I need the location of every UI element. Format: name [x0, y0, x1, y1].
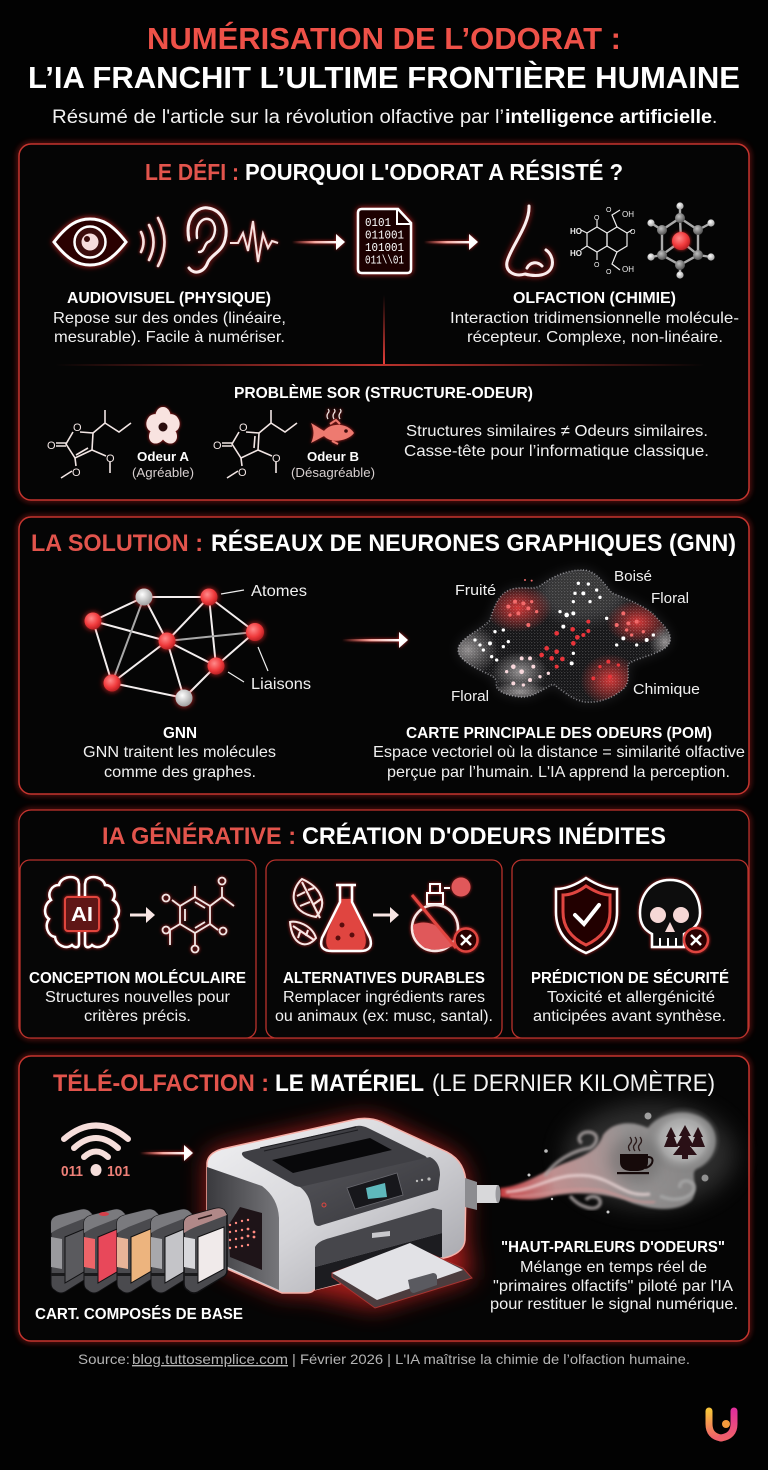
heading: la solution: LA SOLUTION :: [31, 530, 203, 557]
icon: digital file: 101001: [365, 241, 404, 255]
heading: le défi: LE DÉFI :: [145, 158, 239, 185]
card: conception moléculaire: [20, 860, 256, 1038]
icon: complex molecule: O: [606, 269, 612, 276]
icon: wifi signal: [61, 1126, 130, 1180]
label: odeur B: [291, 449, 375, 480]
molecule A: O: [106, 453, 115, 465]
text: alternatives: [275, 970, 493, 1025]
arrow: signal to file: [292, 234, 345, 250]
text: olfaction: [450, 290, 739, 346]
panel: le défi: [19, 144, 749, 500]
card: prédiction de sécurité: [512, 860, 748, 1038]
heading: problème SOR: PROBLÈME SOR (STRUCTURE-ODEUR): [234, 385, 533, 402]
printer body: [207, 1118, 466, 1293]
molecule B: O: [238, 467, 247, 479]
icon: complex molecule: [570, 207, 636, 276]
label: liaisons: Liaisons: [251, 676, 311, 693]
molecule A: O: [73, 422, 82, 434]
heading: le défi: POURQUOI L'ODORAT A RÉSISTÉ ?: [245, 158, 623, 185]
icon: 3D atom model: [647, 202, 715, 279]
icon: crossed perfume: [412, 878, 478, 952]
label: atomes: Atomes: [251, 583, 307, 600]
icon: signal waveform: [230, 221, 278, 262]
text: structures similaires: [404, 423, 709, 460]
text: carte principale: perçue par l’humain. L'IA apprend la perception.: [387, 764, 730, 781]
printer nozzle: [465, 1178, 477, 1210]
text: GNN: comme des graphes.: [104, 764, 256, 781]
icon: AI brain: AI: [71, 904, 93, 926]
subtitle: [52, 107, 717, 128]
text: alternatives: ou animaux (ex: musc, santal).: [275, 1008, 493, 1025]
icon: shield: [556, 878, 617, 953]
subtitle: .: [712, 107, 717, 128]
source footer: | Février 2026 | L'IA maîtrise la chimie de l’olfaction humaine.: [292, 1351, 690, 1367]
principal odor map blob: [456, 567, 672, 705]
molecule B: O: [213, 440, 222, 452]
map labels: Boisé: [614, 568, 652, 585]
molecule A: O: [72, 467, 81, 479]
text: audiovisuel: [53, 290, 286, 346]
arrow: flask to perfume: [373, 907, 399, 923]
icon: digital file: 011001: [365, 228, 404, 242]
label: odeur A: Odeur A: [137, 449, 190, 464]
panel: IA générative: [19, 810, 749, 1038]
map labels: Floral: [651, 590, 689, 607]
molecule B: O: [272, 453, 281, 465]
label: odeur A: (Agréable): [132, 465, 194, 480]
text: conception: Structures nouvelles pour: [45, 989, 231, 1006]
label: atomes: [221, 583, 307, 600]
card: alternatives durables: [266, 860, 502, 1038]
label: odeur A: [132, 449, 194, 480]
text: GNN: [83, 725, 276, 781]
molecule A: O: [47, 440, 56, 452]
source footer: blog.tuttosemplice.com: [132, 1351, 288, 1367]
text: prédiction: Toxicité et allergénicité: [547, 989, 715, 1006]
heading: télé-olfaction: (LE DERNIER KILOMÈTRE): [432, 1070, 715, 1097]
panel: télé-olfaction: [19, 1056, 749, 1341]
icon: complex molecule: O: [594, 262, 600, 269]
text: conception: CONCEPTION MOLÉCULAIRE: [29, 970, 246, 987]
text: alternatives: Remplacer ingrédients rares: [283, 989, 485, 1006]
panel: la solution: [19, 517, 749, 794]
text: prédiction: anticipées avant synthèse.: [533, 1008, 726, 1025]
text: haut-parleurs d'odeurs: pour restituer le signal numérique.: [490, 1296, 738, 1313]
icon: digital file: [358, 209, 411, 273]
scent smoke: [500, 1103, 735, 1214]
text: audiovisuel: AUDIOVISUEL (PHYSIQUE): [67, 290, 271, 307]
icon: complex molecule: OH: [622, 210, 634, 219]
icon: complex molecule: HO: [570, 227, 582, 236]
molecule B: [213, 410, 297, 479]
icon: complex molecule: OH: [622, 265, 634, 274]
icon: nose: [507, 206, 552, 275]
text: conception: [29, 970, 246, 1025]
title: L’IA FRANCHIT L’ULTIME FRONTIÈRE HUMAINE: [28, 60, 740, 95]
printer front: [300, 1157, 440, 1226]
subtitle: Résumé de l'article sur la révolution olfactive par l’: [52, 107, 504, 128]
text: audiovisuel: mesurable). Facile à numériser.: [54, 329, 285, 346]
text: prédiction: PRÉDICTION DE SÉCURITÉ: [531, 970, 729, 987]
printer: [207, 1118, 500, 1308]
text: structures similaires: Casse-tête pour l’informatique classique.: [404, 443, 709, 460]
heading: télé-olfaction: LE MATÉRIEL: [275, 1069, 424, 1097]
logo: [709, 1411, 734, 1438]
icon: AI brain: [45, 877, 119, 947]
text: audiovisuel: Repose sur des ondes (linéaire,: [53, 310, 286, 327]
text: haut-parleurs d'odeurs: Mélange en temps réel de: [520, 1259, 707, 1276]
text: GNN: GNN traitent les molécules: [83, 744, 276, 761]
heading: IA générative: IA GÉNÉRATIVE :: [102, 822, 296, 850]
source footer: Source:: [78, 1351, 130, 1367]
icon: trees: [664, 1125, 705, 1159]
arrow: file to nose: [424, 234, 478, 250]
source footer: [78, 1351, 690, 1367]
paper tray: [332, 1245, 472, 1308]
icon: skull: [640, 880, 708, 952]
icon: generated molecule: [162, 878, 234, 952]
icon: sound waves: [141, 218, 164, 266]
icon: wifi signal: 011: [61, 1163, 83, 1180]
heading: la solution: RÉSEAUX DE NEURONES GRAPHIQUES (GNN): [211, 529, 736, 557]
icon: ear: [188, 208, 226, 272]
text: carte principale: CARTE PRINCIPALE DES ODEURS (POM): [406, 725, 712, 742]
map labels: Chimique: [633, 681, 700, 698]
text: conception: critères précis.: [84, 1008, 191, 1025]
text: olfaction: récepteur. Complexe, non-linéaire.: [467, 329, 723, 346]
icon: digital file: 0101: [365, 216, 391, 230]
arrow: graph to map: [342, 632, 408, 648]
label: cartridges: CART. COMPOSÉS DE BASE: [35, 1306, 243, 1323]
icon: eye: [54, 219, 126, 265]
icon: complex molecule: O: [594, 215, 600, 222]
label: odeur B: (Désagréable): [291, 465, 375, 480]
heading: IA générative: [102, 822, 666, 850]
subtitle: intelligence artificielle: [505, 107, 712, 128]
icon: complex molecule: O: [630, 229, 636, 236]
map labels: [451, 568, 700, 705]
scent cartridges: [51, 1208, 227, 1293]
icon: leaves: [290, 879, 322, 944]
icon: complex molecule: O: [606, 207, 612, 214]
icon: flask: [321, 885, 371, 951]
icon: flower: [144, 407, 182, 447]
heading: télé-olfaction: TÉLÉ-OLFACTION :: [53, 1069, 269, 1097]
molecule A: [47, 410, 131, 479]
icon: coffee cup: [617, 1137, 652, 1174]
text: structures similaires: Structures similaires ≠ Odeurs similaires.: [406, 423, 708, 440]
graph network: [84, 588, 264, 706]
icon: wifi signal: 101: [107, 1163, 130, 1180]
icon: fish with stench: [311, 409, 354, 444]
icon: digital file: 011\\01: [365, 254, 404, 268]
text: prédiction: [531, 970, 729, 1025]
text: carte principale: Espace vectoriel où la distance = similarité olfactive: [373, 744, 745, 761]
map labels: Floral: [451, 688, 489, 705]
arrow: signal to printer: [140, 1145, 193, 1161]
label: liaisons: [228, 647, 311, 693]
heading: télé-olfaction: [53, 1069, 715, 1097]
text: haut-parleurs d'odeurs: [490, 1239, 738, 1313]
heading: IA générative: CRÉATION D'ODEURS INÉDITES: [302, 822, 666, 850]
text: alternatives: ALTERNATIVES DURABLES: [283, 970, 485, 987]
text: GNN: GNN: [163, 725, 197, 742]
text: haut-parleurs d'odeurs: "HAUT-PARLEURS D'ODEURS": [501, 1239, 725, 1256]
text: haut-parleurs d'odeurs: "primaires olfactifs" piloté par l'IA: [493, 1278, 733, 1295]
arrow: brain to molecule: [130, 907, 155, 923]
label: odeur B: Odeur B: [307, 449, 359, 464]
molecule B: O: [239, 422, 248, 434]
text: carte principale: [373, 725, 745, 781]
icon: complex molecule: HO: [570, 249, 582, 258]
text: olfaction: Interaction tridimensionnelle molécule-: [450, 310, 739, 327]
title: [28, 21, 740, 95]
printer side: [207, 1167, 279, 1290]
printer top panel: [242, 1126, 427, 1187]
map labels: Fruité: [455, 582, 496, 599]
title: NUMÉRISATION DE L’ODORAT :: [147, 21, 621, 56]
text: olfaction: OLFACTION (CHIMIE): [513, 290, 676, 307]
